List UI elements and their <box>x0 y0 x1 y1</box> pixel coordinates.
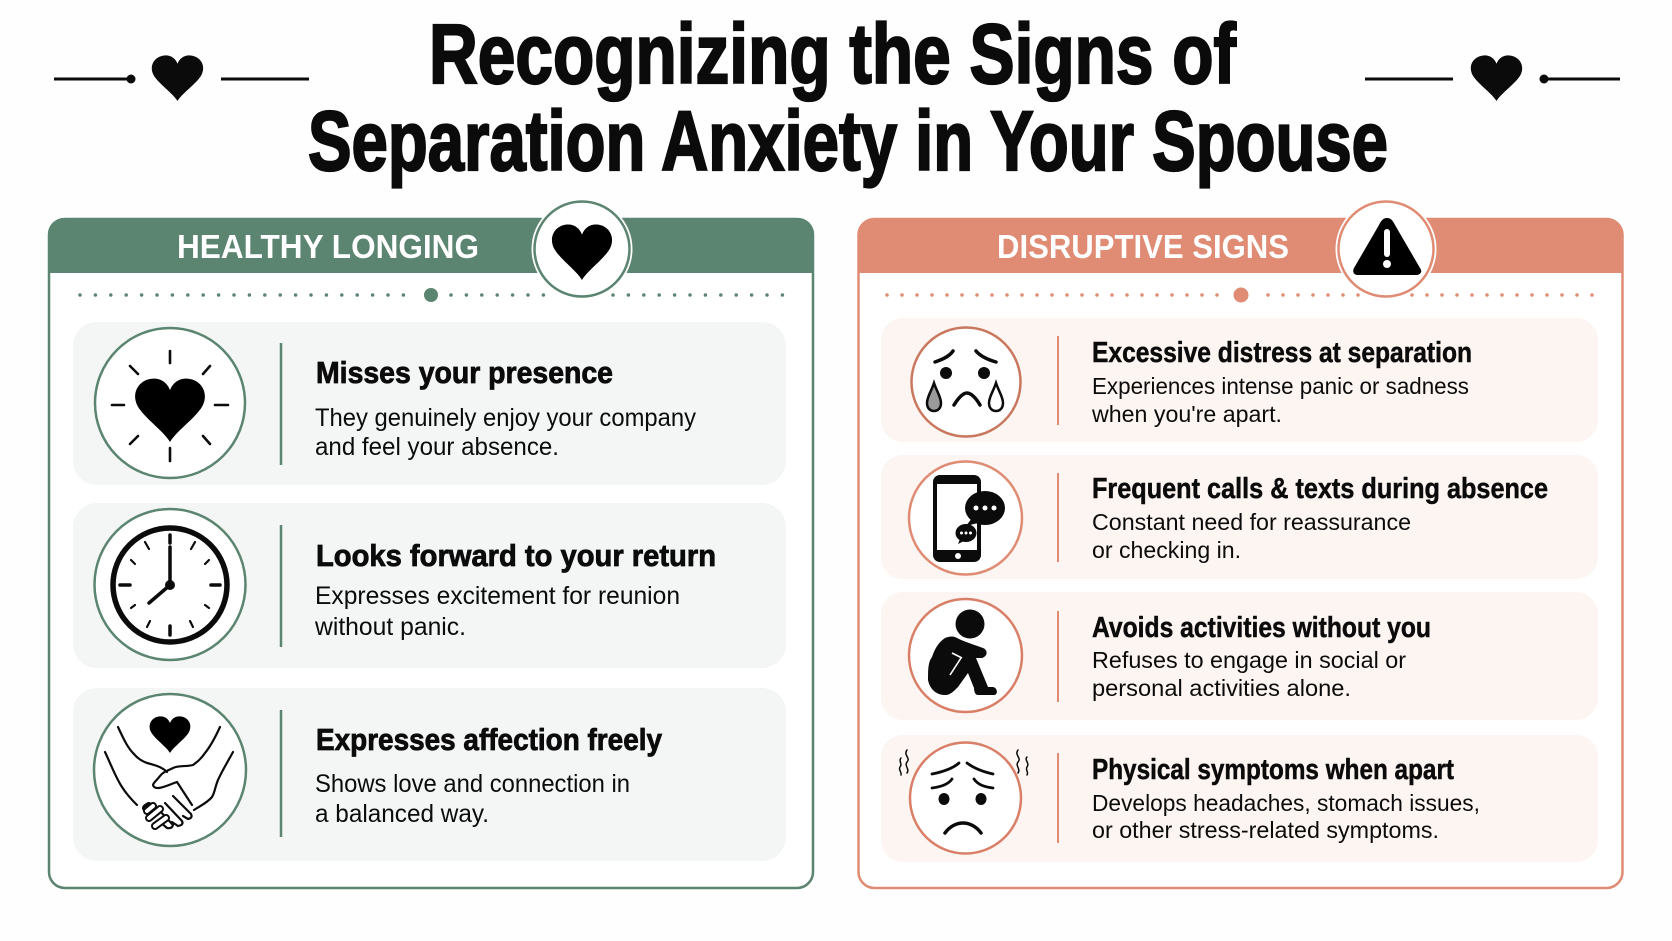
text: excessive distress: Experiences intense panic or sadness <box>1092 373 1469 399</box>
icon: warning triangle badge <box>1336 198 1436 300</box>
title: Separation Anxiety in Your Spouse <box>308 94 1388 188</box>
row: looks forward to your return <box>73 503 786 668</box>
text: avoids activities: Avoids activities without you <box>1092 612 1431 644</box>
text: avoids activities: personal activities alone. <box>1092 675 1351 701</box>
text: physical symptoms <box>1092 754 1480 843</box>
icon: worried face with stress marks <box>899 742 1028 854</box>
text: looks forward to your return: without panic. <box>314 613 466 641</box>
text: misses your presence: and feel your absence. <box>315 433 559 461</box>
text: misses your presence <box>315 355 696 461</box>
icon: person hugging knees <box>909 599 1022 712</box>
text: excessive distress <box>1091 337 1472 427</box>
text: misses your presence: Misses your presence <box>316 355 613 390</box>
title: Recognizing the Signs of <box>429 7 1237 101</box>
text: frequent calls and texts <box>1092 473 1548 563</box>
icon: header heart badge <box>532 198 632 300</box>
icon: phone with chat bubbles <box>909 462 1022 574</box>
text: avoids activities: Refuses to engage in social or <box>1092 647 1406 673</box>
text: frequent calls and texts: Constant need for reassurance <box>1092 509 1411 535</box>
row: excessive distress <box>881 318 1598 442</box>
row: expresses affection freely <box>73 688 786 861</box>
row: misses your presence <box>73 322 786 485</box>
row: frequent calls and texts <box>881 455 1598 579</box>
icon: clock <box>94 509 246 660</box>
decoration: right heart divider <box>1365 55 1620 101</box>
text: physical symptoms: Physical symptoms when apart <box>1092 754 1454 786</box>
text: frequent calls and texts: or checking in. <box>1092 537 1241 563</box>
text: expresses affection freely: Shows love and connection in <box>315 770 630 798</box>
icon: crying face <box>912 328 1020 436</box>
text: expresses affection freely: Expresses affection freely <box>316 722 663 757</box>
text: expresses affection freely: a balanced way. <box>315 800 489 828</box>
panel header: disruptive signs <box>858 218 1623 273</box>
text: physical symptoms: or other stress-related symptoms. <box>1092 817 1439 843</box>
text: looks forward to your return: Expresses excitement for reunion <box>315 582 680 610</box>
icon: holding hands with heart <box>94 694 246 846</box>
text: excessive distress: Excessive distress at separation <box>1092 337 1472 369</box>
row: physical symptoms <box>881 735 1598 862</box>
text: looks forward to your return: Looks forward to your return <box>316 538 716 573</box>
panel: healthy longing <box>48 198 814 888</box>
decoration: left heart divider <box>54 55 309 101</box>
panel header: healthy longing: HEALTHY LONGING <box>177 228 479 265</box>
text: avoids activities <box>1092 612 1431 701</box>
text: physical symptoms: Develops headaches, stomach issues, <box>1092 790 1480 816</box>
icon: radiating heart <box>95 328 245 478</box>
text: frequent calls and texts: Frequent calls & texts during absence <box>1092 473 1548 505</box>
row: avoids activities <box>881 592 1598 720</box>
panel header: disruptive signs: DISRUPTIVE SIGNS <box>997 228 1289 265</box>
text: expresses affection freely <box>315 722 663 828</box>
text: excessive distress: when you're apart. <box>1091 401 1282 427</box>
text: misses your presence: They genuinely enjoy your company <box>315 404 696 432</box>
title <box>308 7 1388 188</box>
panel: disruptive signs <box>858 198 1623 888</box>
panel header: healthy longing <box>48 218 814 273</box>
text: looks forward to your return <box>314 538 716 641</box>
